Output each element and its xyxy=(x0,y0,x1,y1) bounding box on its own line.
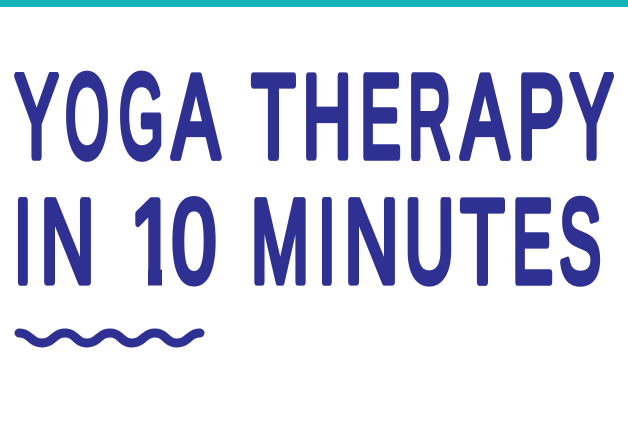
title line 1: G xyxy=(119,50,164,182)
title line 1: O xyxy=(65,50,109,183)
title line 1: Y xyxy=(570,52,613,183)
title line 2 xyxy=(18,196,600,287)
title line 1: H xyxy=(303,52,352,183)
title line 1: E xyxy=(360,50,401,182)
title line 2: M xyxy=(251,175,309,308)
title line 1 xyxy=(15,50,613,183)
title line 1: Y xyxy=(15,52,58,183)
title line 1: A xyxy=(172,51,220,182)
title line 1: T xyxy=(252,51,295,182)
title line 1: R xyxy=(408,50,451,182)
title line 2: T xyxy=(460,176,504,307)
title line 2: 0 xyxy=(172,177,216,308)
title line 2: U xyxy=(404,176,454,308)
title line 2: 1 xyxy=(130,176,176,307)
title xyxy=(14,70,614,287)
title line 2: S xyxy=(559,176,601,308)
title line 2: N xyxy=(344,175,399,307)
wavy underline xyxy=(19,333,200,343)
title line 2: E xyxy=(512,175,553,307)
title line 1: A xyxy=(461,51,509,182)
title line 2: I xyxy=(14,176,32,308)
title line 2: N xyxy=(40,175,95,307)
title line 2: I xyxy=(318,176,336,308)
title line 1: P xyxy=(518,50,564,183)
top teal bar xyxy=(0,0,628,7)
